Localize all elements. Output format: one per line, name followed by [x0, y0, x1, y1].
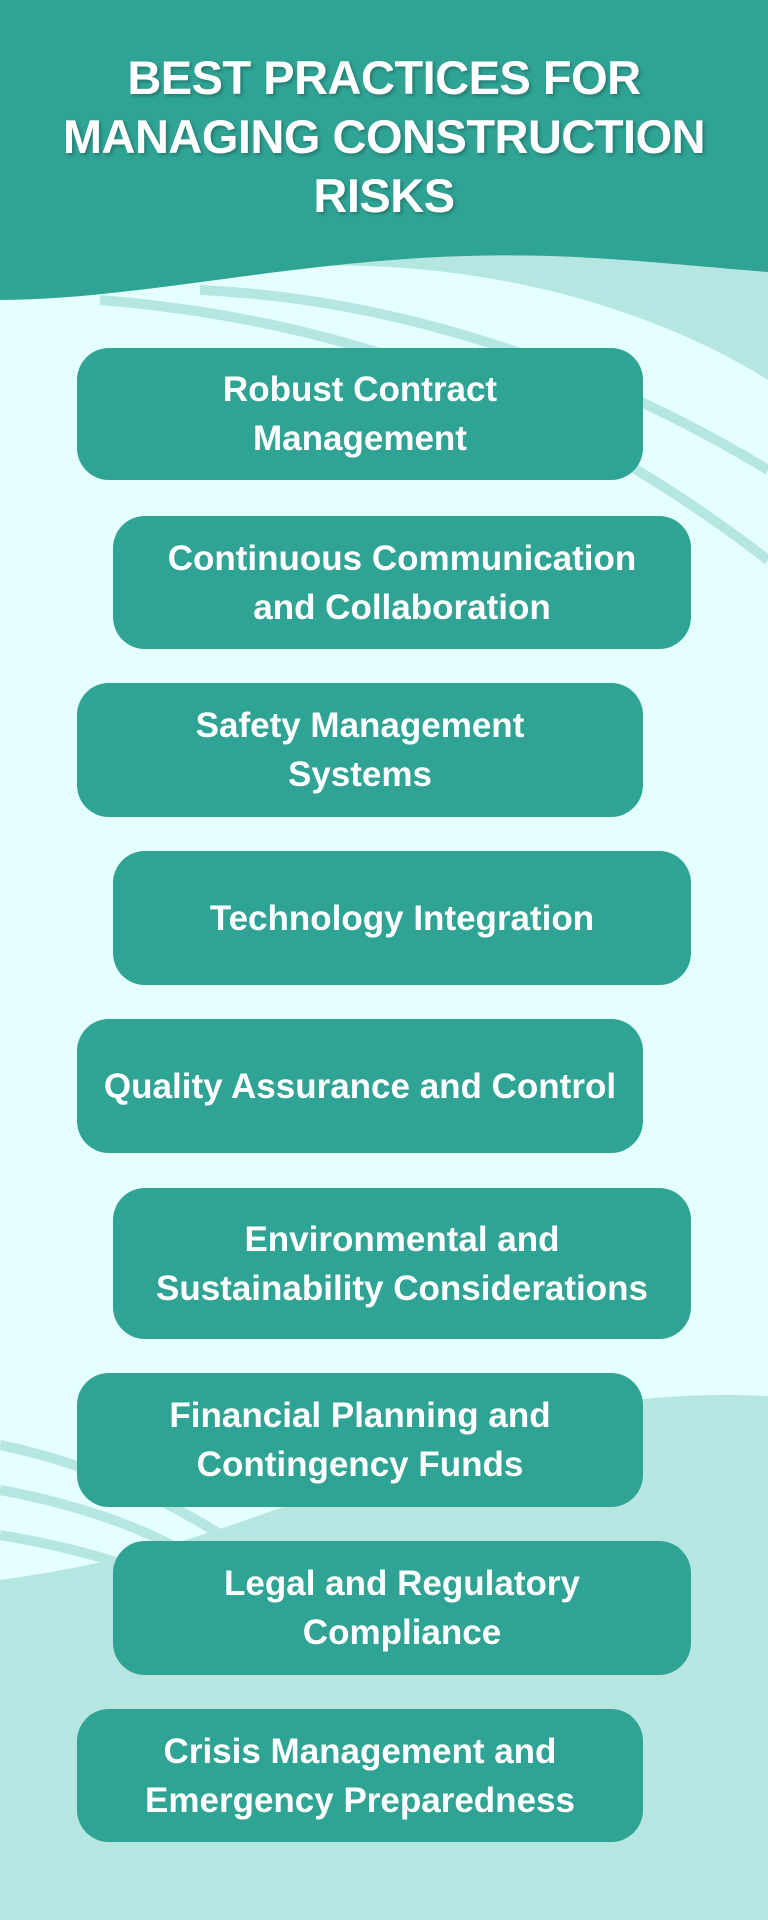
box: crisis management [77, 1709, 643, 1842]
box: quality assurance: Quality Assurance and Control [104, 1066, 616, 1106]
box: technology integration: Technology Integration [210, 898, 594, 938]
box: legal compliance: Compliance [303, 1613, 501, 1652]
box: safety management: Safety Management [196, 706, 524, 745]
title: BEST PRACTICES FOR [127, 51, 641, 104]
box: financial planning: Financial Planning and [169, 1396, 551, 1435]
box: legal compliance [113, 1541, 691, 1675]
box: quality assurance [77, 1019, 643, 1153]
box: continuous communication: Continuous Communication [168, 538, 636, 578]
box: crisis management: Crisis Management and [164, 1732, 556, 1770]
box: crisis management: Emergency Preparedness [145, 1780, 575, 1820]
box: environmental: Environmental and [244, 1220, 560, 1258]
box: technology integration [113, 851, 691, 985]
box: robust contract management: Management [253, 419, 467, 458]
box: environmental: Sustainability Considerations [156, 1268, 648, 1308]
box: safety management: Systems [288, 755, 432, 794]
box: robust contract management: Robust Contract [223, 370, 497, 409]
box: safety management [77, 683, 643, 817]
box: legal compliance: Legal and Regulatory [224, 1564, 580, 1603]
box: robust contract management [77, 348, 643, 480]
box: environmental [113, 1188, 691, 1339]
box: financial planning: Contingency Funds [197, 1445, 523, 1484]
title [63, 51, 706, 222]
box: continuous communication: and Collaboration [253, 588, 551, 626]
title: RISKS [313, 169, 455, 222]
title: MANAGING CONSTRUCTION [63, 110, 705, 163]
box: financial planning [77, 1373, 643, 1507]
box: continuous communication [113, 516, 691, 649]
